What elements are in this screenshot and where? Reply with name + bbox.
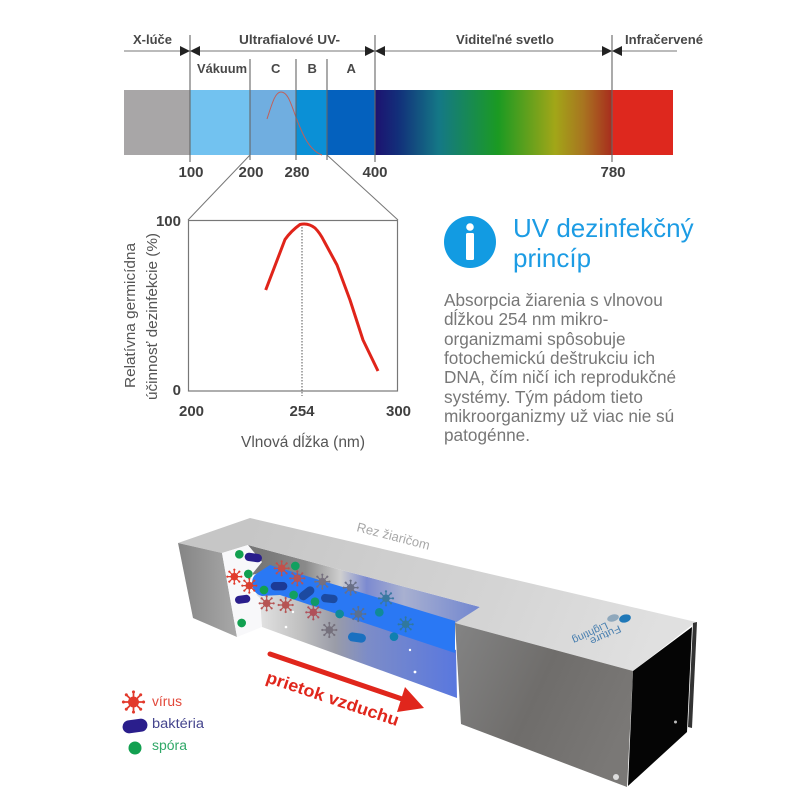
y axis values: 100 (156, 213, 181, 230)
channel floor (255, 585, 457, 698)
logo (570, 613, 632, 647)
description text: Absorpcia žiarenia s vlnovou (444, 290, 663, 310)
range labels (133, 32, 703, 76)
y axis title: Relatívna germicídna (122, 242, 139, 388)
logo: Future (588, 622, 623, 647)
rear flange (688, 622, 697, 728)
x axis values: 200 (179, 403, 204, 420)
logo: Lighting (570, 619, 610, 646)
x axis title: Vlnová dĺžka (nm) (241, 433, 365, 451)
heading: UV dezinfekčný (513, 213, 694, 243)
UV lamp cutaway (178, 518, 697, 787)
germicidal efficiency chart (122, 213, 411, 451)
range labels: B (308, 61, 317, 76)
white sparkles (285, 611, 416, 673)
range labels: C (271, 61, 281, 76)
electromagnetic spectrum (124, 32, 703, 181)
wavelength scale labels (178, 164, 626, 181)
description text: fotochemickú deštrukciu ich (444, 348, 655, 368)
top face (178, 518, 696, 671)
description text: organizmami spôsobuje (444, 329, 626, 349)
viruses (226, 560, 414, 638)
screws (613, 720, 677, 780)
description text: systémy. Tým pádom tieto (444, 387, 643, 407)
left end face (178, 543, 237, 637)
legend: bacteria: baktéria (152, 716, 205, 731)
range labels: Viditeľné svetlo (456, 32, 554, 47)
section label: Rez žiaričom (355, 519, 432, 553)
airborne particles (226, 550, 414, 643)
wavelength scale labels: 780 (600, 164, 626, 181)
airflow arrow (270, 654, 424, 712)
heading (513, 213, 694, 273)
small absorption curve (267, 92, 322, 155)
range labels: X-lúče (133, 32, 172, 47)
heading: princíp (513, 243, 591, 273)
chart frame (188, 220, 398, 391)
legend: virus: vírus (152, 694, 182, 709)
wavelength scale labels: 100 (178, 164, 204, 181)
range arrowheads (180, 46, 622, 56)
channel back wall (248, 545, 480, 625)
description text: dĺžkou 254 nm mikro- (444, 309, 608, 329)
range labels: Infračervené (625, 32, 703, 47)
white cut section (222, 545, 262, 637)
description text: patogénne. (444, 425, 530, 445)
x axis values: 254 (289, 403, 315, 420)
icon: info (444, 216, 496, 268)
spores (235, 550, 398, 641)
wavelength scale labels: 200 (238, 164, 264, 181)
x axis values (179, 403, 411, 420)
airflow label: prietok vzduchu (264, 668, 402, 730)
description text: DNA, čím ničí ich reprodukčné (444, 367, 676, 387)
right block side (455, 623, 633, 787)
range labels: Vákuum (197, 61, 247, 76)
zoom connector lines (188, 155, 398, 220)
y axis title (122, 233, 161, 400)
wavelength scale labels: 280 (284, 164, 310, 181)
efficiency curve (266, 224, 378, 371)
y axis title: účinnosť dezinfekcie (%) (144, 233, 161, 400)
bacteria (235, 552, 366, 643)
right block opening (628, 627, 692, 786)
blue UV band (252, 565, 455, 653)
spectrum bar (124, 90, 673, 155)
x axis values: 300 (386, 403, 411, 420)
legend (122, 691, 205, 754)
254 nm marker (301, 224, 303, 396)
range dividers (124, 35, 677, 162)
wavelength scale labels: 400 (362, 164, 388, 181)
description text: mikroorganizmy už viac nie sú (444, 406, 674, 426)
legend: spore: spóra (152, 738, 187, 753)
y axis values (156, 213, 181, 399)
range labels: Ultrafialové UV- (239, 32, 340, 47)
description text (444, 290, 676, 445)
y axis values: 0 (173, 382, 181, 399)
range labels: A (346, 61, 356, 76)
